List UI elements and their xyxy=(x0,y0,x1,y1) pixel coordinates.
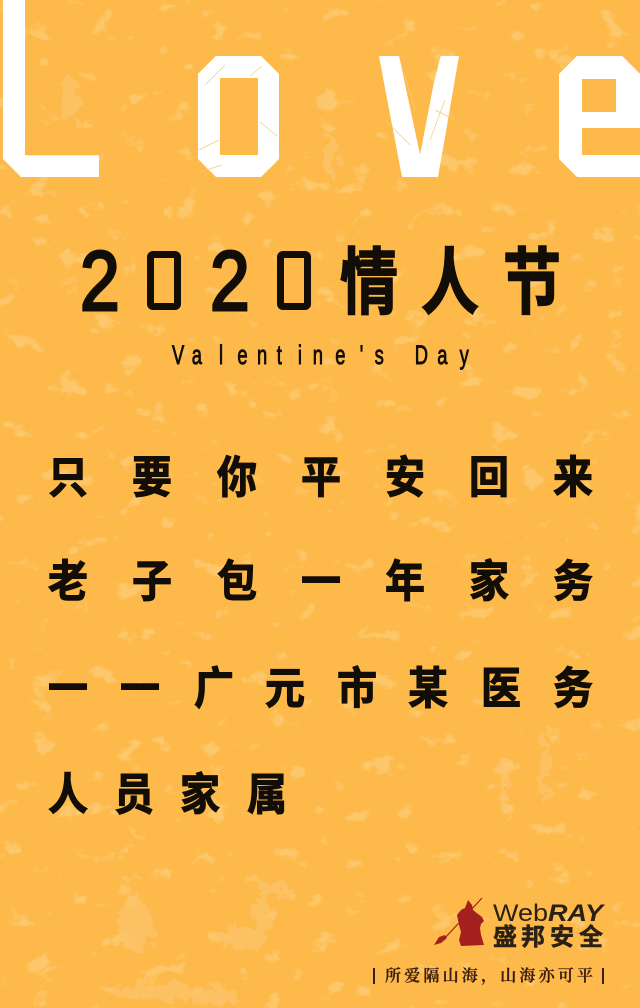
icon: red warrior with halberd xyxy=(434,898,484,946)
title digits: 2 xyxy=(210,233,250,328)
title digits: 0 xyxy=(140,231,187,329)
message line 2: 老子包一年家务 xyxy=(48,557,593,606)
message line 4: 人员家属 xyxy=(48,770,287,819)
tagline: 所爱隔山海，山海亦可平 xyxy=(385,967,593,985)
message line 1: 只要你平安回来 xyxy=(48,453,593,502)
headline: Love xyxy=(2,0,640,177)
title: 2020 情人节 xyxy=(82,245,559,316)
message line 3: 一一广元市某医务 xyxy=(48,664,593,713)
logo wordmark: Web RAY xyxy=(493,900,605,927)
logo: WebRAY xyxy=(434,898,605,951)
logo Chinese name: 盛邦安全 xyxy=(493,924,603,951)
title digits: 0 xyxy=(270,231,317,329)
scratches on Love letters xyxy=(199,60,455,172)
title digits xyxy=(82,250,311,312)
subtitle: Valentine's Day xyxy=(172,339,469,370)
title digits: 2 xyxy=(80,233,120,328)
title Chinese: 情人节 xyxy=(340,243,561,323)
